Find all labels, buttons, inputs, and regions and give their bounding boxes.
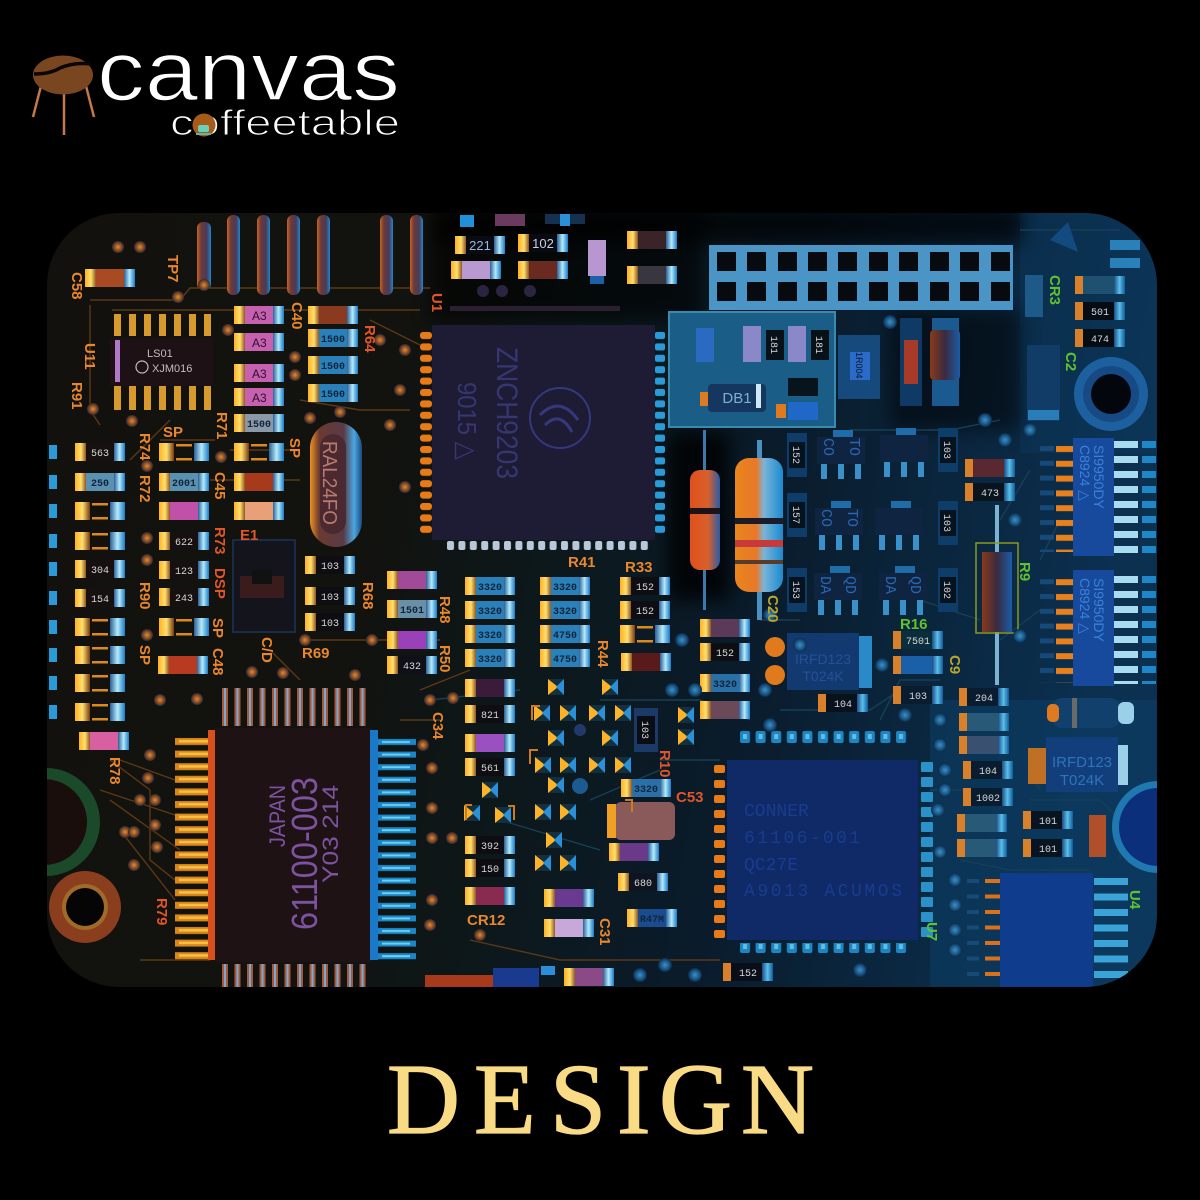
small dark blue packages: 157 <box>789 506 800 524</box>
SMD components: lower right: 7501 <box>906 637 930 648</box>
SMD components: centre: 103 <box>321 619 339 630</box>
blue components upper right: 474 <box>1091 335 1109 346</box>
silkscreen labels: R41 <box>568 554 596 571</box>
silkscreen labels: R9 <box>1016 562 1033 581</box>
silkscreen labels: R78 <box>106 757 123 785</box>
silkscreen labels <box>68 255 1143 946</box>
ICs: SI9950DY: C8924 △ <box>1077 445 1093 501</box>
silkscreen labels: R33 <box>625 559 653 576</box>
SMD components: lower right: 104 <box>979 767 997 778</box>
silkscreen labels: R16 <box>900 616 928 633</box>
IC: 61100-003: Y03 214 <box>318 785 343 883</box>
blue components upper right: 1R004 <box>854 352 864 379</box>
IC: CONNER 61106-001: A9013 ACUMOS <box>744 882 902 902</box>
SMD components: lower right: 1002 <box>976 794 1000 805</box>
SMD components: left columns: 154 <box>91 595 109 606</box>
small dark blue packages: 153 <box>789 581 800 599</box>
silkscreen labels: R74 <box>136 433 153 461</box>
blue components upper right: 501 <box>1091 308 1109 319</box>
SMD components: centre: 152 <box>716 649 734 660</box>
IC: IRFD123 centre: IRFD123 <box>795 651 851 667</box>
silkscreen labels: C34 <box>429 712 446 740</box>
IC: IRFD123 centre: T024K <box>802 668 844 684</box>
SMD components: centre: 152 <box>739 969 757 980</box>
SMD components: lower right <box>818 631 1106 857</box>
top header pins <box>197 215 423 295</box>
SMD components: centre: 3320 <box>478 655 502 666</box>
SMD components: upper left: A3 <box>252 391 267 405</box>
mounting hole: right edge <box>1112 781 1157 873</box>
small blue sub-board: 181 <box>767 336 778 354</box>
axial resistors <box>690 430 783 620</box>
IC: ZNCH9203 main chip <box>420 325 665 551</box>
SMD components: upper left: 1500 <box>247 420 271 431</box>
mounting ring: top right <box>1074 357 1148 431</box>
small dark blue packages: 102 <box>940 581 951 599</box>
silkscreen labels: U11 <box>81 343 98 370</box>
SMD components: centre <box>305 556 773 987</box>
silkscreen labels: SP <box>136 645 153 665</box>
ICs: SI9950DY: SI9950DY <box>1091 578 1107 642</box>
silkscreen labels: C20 <box>764 595 781 623</box>
wordmark: coffeetable: coffeetable <box>170 102 400 143</box>
vias <box>87 241 1037 982</box>
IC: 61100-003: JAPAN <box>265 785 290 847</box>
silkscreen labels: R71 <box>213 412 230 440</box>
small dark blue packages: CO <box>817 509 834 527</box>
SMD components: left columns: 304 <box>91 566 109 577</box>
icon: coffee bean table <box>33 56 94 135</box>
silkscreen labels: R50 <box>436 645 453 673</box>
SMD components: top strip: 102 <box>532 236 554 251</box>
silkscreen labels: SP <box>209 618 226 638</box>
silkscreen labels: C2 <box>1062 352 1079 371</box>
SMD components: upper left: 1500 <box>321 335 345 346</box>
SMD components: centre: 4750 <box>553 655 577 666</box>
SMD components: centre: 3320 <box>634 785 658 796</box>
SMD components: centre: 4750 <box>553 631 577 642</box>
logo: canvas coffeetable <box>33 24 400 143</box>
IC: IRFD123 right: IRFD123 <box>1052 754 1112 771</box>
SMD components: centre: 103 <box>321 562 339 573</box>
SMD components: lower right: 204 <box>975 694 993 705</box>
small blue sub-board: 181 <box>812 336 823 354</box>
SMD components: centre: 3320 <box>478 583 502 594</box>
SMD components: centre: 821 <box>481 711 499 722</box>
silkscreen labels: C9 <box>946 655 963 674</box>
SMD components: centre: 103 <box>638 721 649 739</box>
silkscreen labels: R79 <box>153 898 170 926</box>
small blue sub-board <box>669 312 835 427</box>
silkscreen labels: R69 <box>302 645 330 662</box>
SMD components: upper left: A3 <box>252 309 267 323</box>
IC: IRFD123 right: T024K <box>1060 772 1104 789</box>
SMD components: left columns: 622 <box>175 538 193 549</box>
SMD components: centre: 3320 <box>553 607 577 618</box>
ICs: SI9950DY: C8924 △ <box>1077 578 1093 634</box>
blue components upper right: 473 <box>981 489 999 500</box>
silkscreen labels: C48 <box>209 648 226 676</box>
silkscreen labels: R91 <box>68 382 85 410</box>
connector header <box>709 245 1013 310</box>
small dark blue packages: TO <box>843 509 860 527</box>
SMD components: centre: 152 <box>636 607 654 618</box>
silkscreen labels: C40 <box>288 302 305 330</box>
SMD components: centre: 392 <box>481 842 499 853</box>
mounting ring: bottom left <box>49 871 121 943</box>
IC: CONNER 61106-001: 61106-001 <box>744 829 860 849</box>
IC: IRFD123 centre <box>765 633 872 690</box>
SMD components: centre: 561 <box>481 764 499 775</box>
silkscreen labels: SP <box>163 424 183 441</box>
silkscreen labels: R68 <box>359 582 376 610</box>
title: DESIGN: DESIGN <box>387 1043 814 1155</box>
SMD components: lower right: 101 <box>1039 817 1057 828</box>
cylinder diode <box>1047 698 1134 728</box>
wordmark: canvas: canvas <box>97 24 400 118</box>
IC: IRFD123 right <box>1028 737 1128 792</box>
silkscreen labels: CR3 <box>1046 275 1063 305</box>
silkscreen labels: TP7 <box>164 255 181 283</box>
SMD components: centre: 3320 <box>553 583 577 594</box>
silkscreen labels: R10 <box>656 750 673 778</box>
SMD components: centre: 3320 <box>478 607 502 618</box>
SMD components: centre: 103 <box>321 593 339 604</box>
IC: LS01 Motorola: LS01 <box>147 348 173 360</box>
panel: circuit board coaster <box>0 205 1200 987</box>
small dark blue packages: DA <box>881 576 898 594</box>
SMD components: centre: 150 <box>481 865 499 876</box>
IC: CONNER 61106-001: QC27E <box>744 856 798 876</box>
SMD components: top strip: 221 <box>469 238 491 253</box>
mounting hole: left edge <box>47 768 100 876</box>
small dark blue packages: DA <box>816 576 833 594</box>
small dark blue packages <box>787 428 958 615</box>
SMD components: centre: 152 <box>636 583 654 594</box>
SMD components: upper left: A3 <box>252 367 267 381</box>
IC: 61100-003 <box>175 688 416 987</box>
silkscreen labels: R44 <box>594 640 611 668</box>
IC: LS01 Motorola <box>110 314 213 410</box>
SMD components: centre: 3320 <box>478 631 502 642</box>
SMD components: upper left <box>85 269 358 432</box>
circuit traces <box>90 230 1120 960</box>
SMD components: top strip: U1 <box>428 293 445 312</box>
silkscreen labels: R64 <box>361 325 378 353</box>
ICs: SI9950DY <box>1040 438 1156 686</box>
SMD components: left columns: 123 <box>175 567 193 578</box>
SMD components: centre: 3320 <box>713 680 737 691</box>
small transistor clusters <box>464 679 694 871</box>
silkscreen labels: R72 <box>136 475 153 503</box>
small dark blue packages: 103 <box>940 514 951 532</box>
silkscreen labels: R73 <box>211 527 228 555</box>
SMD components: centre: R47M <box>640 915 664 926</box>
silkscreen labels: U4 <box>1126 890 1143 910</box>
silkscreen labels: C45 <box>211 472 228 500</box>
silkscreen labels: C/D <box>258 637 275 663</box>
crystal RAL24FO <box>310 422 362 547</box>
SMD components: lower right: 103 <box>909 692 927 703</box>
silkscreen labels: C31 <box>596 918 613 946</box>
silkscreen labels: C58 <box>68 272 85 300</box>
SMD components: left columns: 563 <box>91 449 109 460</box>
switch E1 <box>233 540 295 632</box>
silkscreen labels: C53 <box>676 789 704 806</box>
small blue sub-board: DB1 <box>722 390 752 407</box>
crystal RAL24FO: RAL24FO <box>318 441 340 525</box>
icon: coffee cup <box>192 114 216 136</box>
SMD components: left columns <box>49 443 284 750</box>
small dark blue packages: QD <box>841 576 858 594</box>
IC: ZNCH9203 main chip: 9015 △ <box>452 382 482 460</box>
axial diode R9 <box>976 505 1018 685</box>
IC: blue chip bottom right <box>965 873 1130 987</box>
SMD components: upper left: 1500 <box>321 390 345 401</box>
SMD components: centre: 432 <box>403 662 421 673</box>
silkscreen labels: DSP <box>211 568 228 599</box>
SMD components: left columns: 250 <box>91 479 109 490</box>
silkscreen labels: U7 <box>923 922 940 941</box>
IC: LS01 Motorola: XJM016 <box>152 363 192 375</box>
SMD components: lower right: 101 <box>1039 845 1057 856</box>
SMD components: centre: 680 <box>634 879 652 890</box>
ICs: SI9950DY: SI9950DY <box>1091 445 1107 509</box>
SMD components: lower right: 104 <box>834 700 852 711</box>
silkscreen labels: CR12 <box>467 912 505 929</box>
silkscreen labels: SP <box>286 438 303 458</box>
silkscreen labels: R90 <box>136 582 153 610</box>
silkscreen labels: E1 <box>240 527 258 544</box>
IC: CONNER 61106-001: CONNER <box>744 802 809 822</box>
silkscreen labels: R48 <box>436 596 453 624</box>
IC: CONNER 61106-001 <box>712 730 934 955</box>
small dark blue packages: CO <box>819 438 836 456</box>
IC: 61100-003: 61100-003 <box>284 777 325 930</box>
small dark blue packages: TO <box>845 438 862 456</box>
small dark blue packages: 152 <box>789 446 800 464</box>
small dark blue packages: 103 <box>940 441 951 459</box>
IC: ZNCH9203 main chip: ZNCH9203 <box>490 347 523 479</box>
small dark blue packages: QD <box>906 576 923 594</box>
SMD components: top strip <box>428 214 677 312</box>
SMD components: left columns: 2001 <box>172 479 196 490</box>
blue components upper right <box>838 222 1140 501</box>
SMD components: upper left: 1500 <box>321 362 345 373</box>
SMD components: left columns: 243 <box>175 594 193 605</box>
SMD components: upper left: A3 <box>252 336 267 350</box>
SMD components: centre: 1501 <box>400 606 424 617</box>
